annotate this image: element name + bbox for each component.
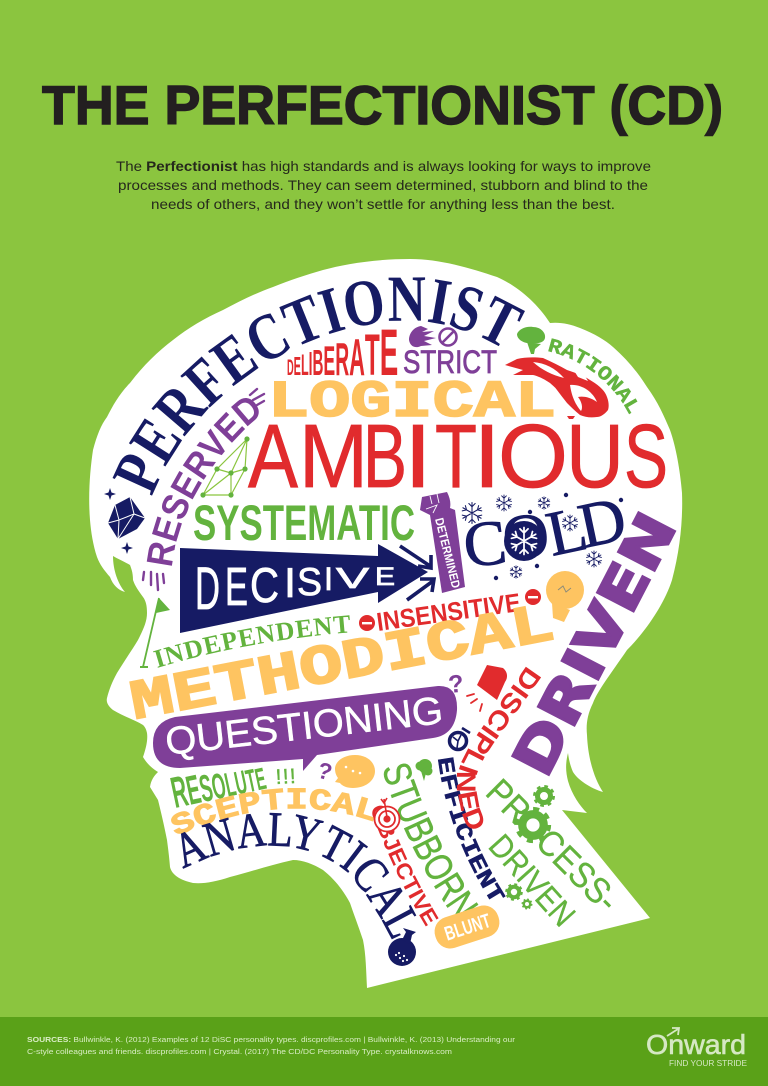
word: Resolute: !!! <box>275 765 296 789</box>
word: Independent: INDEPENDENT <box>153 615 350 668</box>
word: Ambitious: O <box>498 407 568 507</box>
intro text block: processes and methods. They can seem determined, stubborn and blind to the <box>118 177 648 193</box>
word: Driven (large): DRIVEN <box>501 503 690 786</box>
sources text: C-style colleagues and friends. discprofiles.com | Crystal. (2017) The CD/DC Personality Type. crystalknows.com <box>27 1047 452 1056</box>
icon: flask <box>388 928 416 966</box>
sources text: SOURCES: Bullwinkle, K. (2012) Examples of 12 DiSC personality types. discprofiles.com | Bullwinkle, K. (2013) Understanding our <box>27 1035 516 1044</box>
title: THE PERFECTIONIST (CD) <box>42 74 723 136</box>
icon: gem <box>104 488 145 554</box>
icon: light bulb <box>546 571 584 622</box>
word: Deliberate: DELIBERATE <box>287 315 398 389</box>
icon: brain tree <box>517 327 545 354</box>
intro text block <box>116 158 651 212</box>
head silhouette <box>89 259 682 988</box>
icon: question mark: ? <box>315 757 335 785</box>
icon: stopwatch <box>450 728 470 750</box>
word: Stubborn: STUBBORN <box>384 764 478 914</box>
logo: Onward: FIND YOUR STRIDE <box>669 1058 747 1068</box>
icon: fist banner with Determined: DETERMINED <box>432 516 463 590</box>
icon: small tree <box>416 759 432 781</box>
icon: yellow speech bubble <box>335 755 375 788</box>
word: Methodical: METHODICAL <box>125 592 560 736</box>
word: Resolute <box>167 751 296 818</box>
speech bubble with Questioning: QUESTIONING <box>163 689 445 764</box>
word: Ambitious: I <box>404 407 432 507</box>
word: Objective with target: OBJECTIVE <box>372 806 438 926</box>
word: Process-driven with gears: DRIVEN <box>482 827 583 933</box>
word: Rational: RATIONAL <box>548 338 638 414</box>
word: Ambitious: B <box>363 407 407 507</box>
icon: stop hand <box>409 326 456 347</box>
word: Cold with snowflakes: COLD <box>460 483 632 581</box>
word: Insensitive with minus icons: INSENSITIVE <box>375 587 522 637</box>
arrow with Decisive: I <box>324 561 333 597</box>
word: Analytical: ANALYTICAL <box>180 812 416 940</box>
arrow with Decisive: S <box>297 561 322 604</box>
word: Ambitious: M <box>299 407 368 507</box>
logo: Onward: Onward <box>646 1029 746 1060</box>
arrow with Decisive: D <box>195 555 220 622</box>
icon: megaphone bell <box>467 665 507 711</box>
icon: action arrows <box>400 546 434 600</box>
word: Strict: STRICT <box>403 344 497 380</box>
word: Disciplined: DISCIPLINED <box>456 666 541 829</box>
arrow with Decisive: C <box>250 559 279 613</box>
word: Logical: LOGICAL <box>268 373 556 432</box>
word: Process-driven with gears: PROCESS- <box>478 771 628 920</box>
intro text block: needs of others, and they won’t settle for anything less than the best. <box>151 196 615 212</box>
icon: motion dashes <box>250 389 264 405</box>
footer band <box>0 1017 768 1086</box>
word: Systematic: SYSTEMATIC <box>193 495 415 551</box>
word: Ambitious: U <box>566 407 624 507</box>
icon: flame <box>505 357 609 419</box>
arrow with Decisive: E <box>225 557 248 617</box>
icon: wireframe shape <box>200 436 250 498</box>
icon: purple question mark: ? <box>447 670 465 699</box>
word: Resolute: RESOLUTE <box>167 751 270 818</box>
sources text <box>27 1035 516 1056</box>
word: Ambitious: S <box>624 407 668 507</box>
word: Ambitious: A <box>248 407 298 507</box>
icon: fist banner with Determined <box>420 492 465 593</box>
word: Efficient: EFFICIENT <box>438 757 506 900</box>
label: Blunt pill: BLUNT <box>442 910 494 946</box>
arrow with Decisive <box>180 544 428 633</box>
label: Blunt pill <box>431 902 503 952</box>
word: Sceptical: SCEPTICAL <box>171 788 374 834</box>
arrow with Decisive: I <box>284 559 296 606</box>
icon: exhaust dashes <box>143 572 164 590</box>
word: Reserved: RESERVED <box>146 398 259 566</box>
arrow with Decisive: V <box>336 563 370 595</box>
intro text block: The Perfectionist has high standards and is always looking for ways to improve <box>116 158 651 174</box>
arrow with Decisive: E <box>375 563 395 591</box>
word: Perfectionist: PERFECTIONIST <box>112 277 525 496</box>
word: Ambitious: T <box>435 407 477 507</box>
icon: flag <box>140 598 170 668</box>
word: Ambitious: I <box>473 407 501 507</box>
